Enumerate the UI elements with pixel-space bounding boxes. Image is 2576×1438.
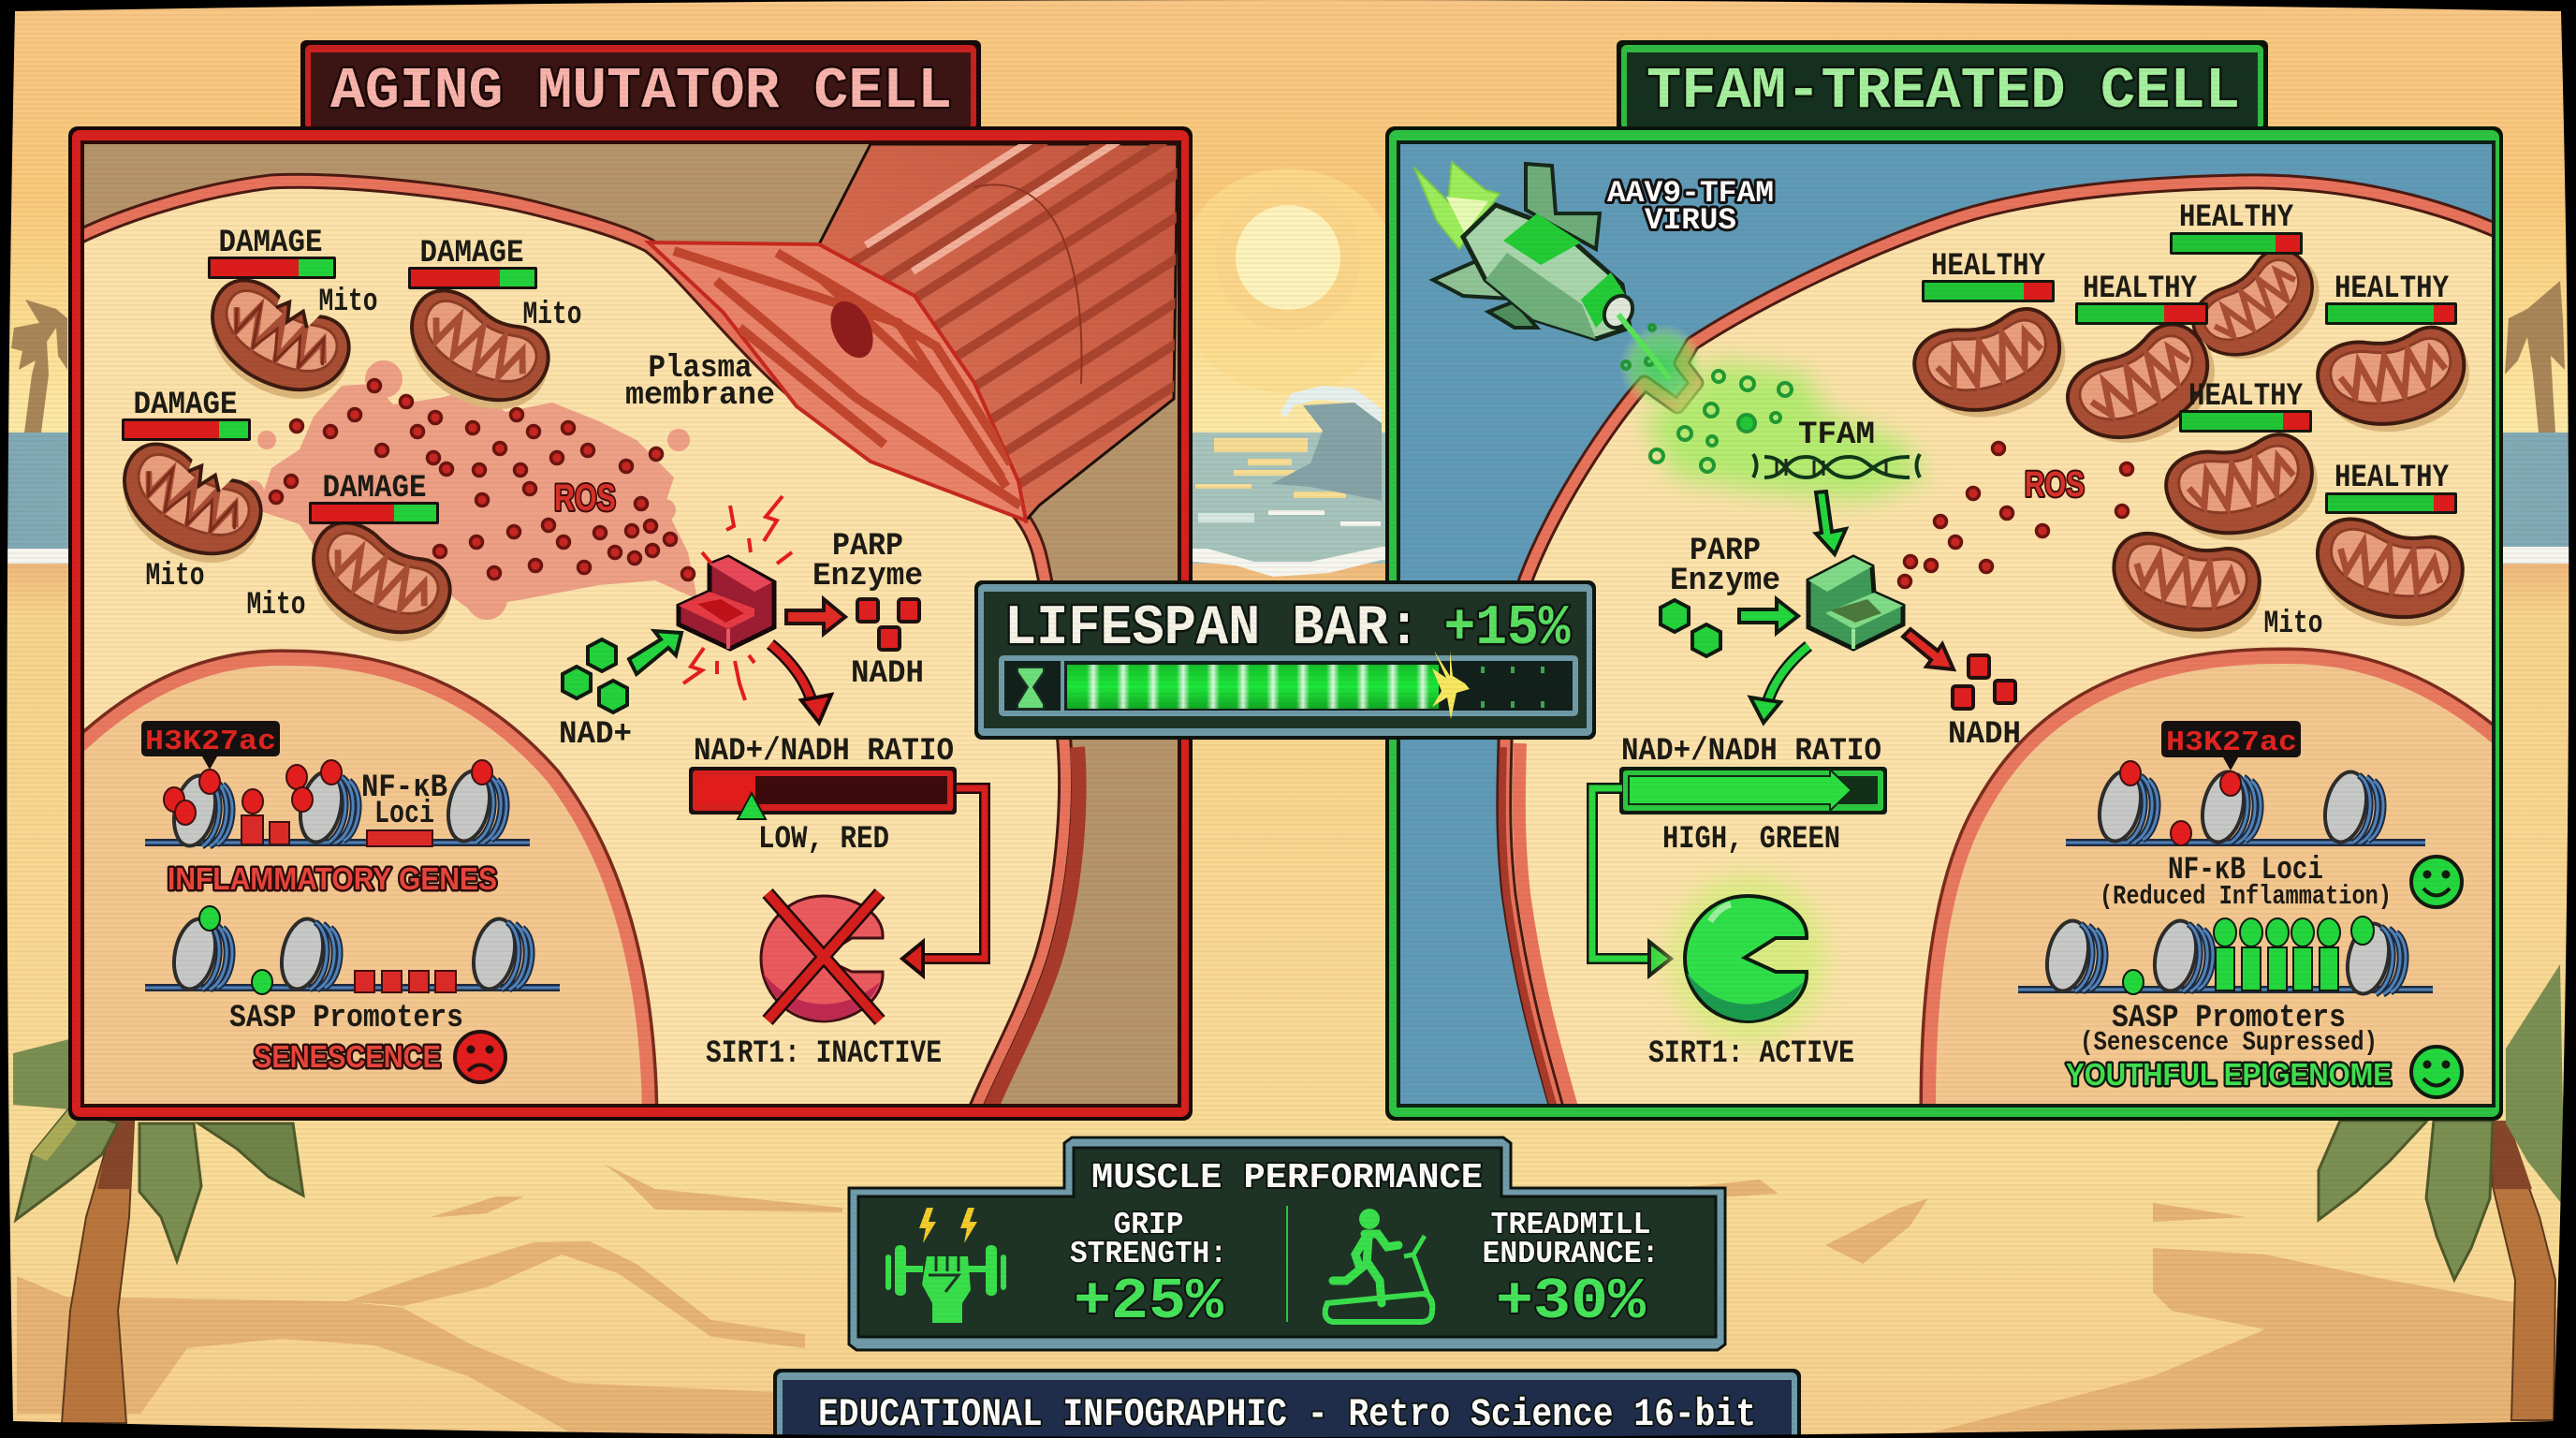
damaged mitochondrion 4: [289, 510, 464, 663]
sirt1 active label: SIRT1: ACTIVE: [1648, 1036, 1854, 1072]
icon: aav9 rocket: [1414, 162, 1638, 339]
healthy bar 1: [2170, 200, 2303, 255]
nucleus: [1929, 657, 2509, 1114]
mito labels: Mito: [522, 298, 582, 333]
muscle bundle: [644, 144, 1178, 524]
title tab: aging mutator cell: [300, 40, 981, 134]
ros cloud: ROS: [554, 477, 616, 519]
title tab: aging mutator cell: AGING MUTATOR CELL: [330, 58, 952, 125]
spark: [1432, 651, 1470, 719]
plasma membrane label: [625, 351, 775, 414]
plasma membrane label: Plasma: [648, 351, 753, 387]
aav9-tfam virus label: VIRUS: [1645, 203, 1736, 238]
mito labels: [146, 285, 582, 624]
healthy mitochondria: [1907, 237, 2478, 652]
treadmill endurance stat: [1483, 1208, 1659, 1335]
nf-kb chromatin: Loci: [374, 797, 434, 832]
healthy bar 4: [2325, 271, 2457, 325]
sasp chromatin: [2018, 917, 2433, 998]
reduced ros: [1898, 442, 2132, 588]
damage bar 2: [408, 236, 537, 289]
right palm silhouette: [2505, 281, 2565, 433]
footer banner: EDUCATIONAL INFOGRAPHIC - Retro Science 16-bit: [818, 1392, 1756, 1437]
sasp promoters label: SASP Promoters: [229, 1001, 463, 1036]
sasp promoters label: SASP Promoters: [2112, 1001, 2346, 1036]
mito label: Mito: [2263, 607, 2323, 642]
icon: active sirt1: [1669, 874, 1826, 1043]
healthy bar 3: [2075, 271, 2208, 325]
panel: muscle performance: [849, 1137, 1725, 1350]
nad+ hexagons: NAD+: [559, 717, 632, 753]
nf-kb loci label: NF-κB Loci: [2168, 853, 2323, 888]
panel: lifespan bar: [974, 580, 1596, 740]
nad+/nadh ratio gauge: HIGH, GREEN: [1662, 822, 1840, 858]
title tab: tfam-treated cell: [1617, 40, 2268, 134]
icon: red parp enzyme: [679, 496, 792, 700]
grip strength stat: +25%: [1074, 1269, 1224, 1335]
aav9-tfam virus label: AAV9-TFAM: [1607, 176, 1774, 211]
connector arrow to sirt1: [902, 788, 985, 976]
nadh squares: NADH: [851, 656, 924, 692]
icon: smiley: [2411, 857, 2462, 907]
parp enzyme label: Enzyme: [812, 559, 923, 594]
damaged mitochondrion 3: [100, 418, 282, 584]
healthy bar 4: HEALTHY: [2334, 271, 2450, 307]
footer banner: [773, 1369, 1801, 1438]
title tab: tfam-treated cell: TFAM-TREATED CELL: [1647, 58, 2240, 125]
nad+/nadh ratio gauge: NAD+/NADH RATIO: [1621, 734, 1881, 770]
nf-kb chromatin: [2066, 761, 2425, 846]
sparks: [683, 496, 792, 700]
tfam green cloud: [1619, 324, 1928, 501]
senescence label: SENESCENCE: [254, 1039, 441, 1074]
sea reflections: [1195, 438, 1346, 498]
nf-kb chromatin: [145, 760, 530, 850]
bottom right palm: [2319, 964, 2565, 1420]
grip strength stat: GRIP: [1114, 1208, 1183, 1242]
grip strength stat: [1070, 1208, 1227, 1335]
arrow: enzyme to nadh: [1903, 629, 1954, 669]
h3k27ac tag: [2161, 721, 2301, 770]
sasp promoters label: [2080, 1001, 2378, 1058]
nadh squares: [851, 599, 924, 692]
arrow: tfam to enzyme: [1816, 492, 1846, 554]
arrow: enzyme to ratio: [1750, 646, 1808, 723]
sirt1 inactive label: SIRT1: INACTIVE: [706, 1036, 942, 1072]
arrow: enzyme to ratio: [770, 644, 831, 723]
parp enzyme label: [1672, 537, 1778, 595]
youthful epigenome label: YOUTHFUL EPIGENOME: [2066, 1057, 2392, 1092]
healthy bar 2: [1922, 249, 2055, 302]
ros cloud: [242, 360, 697, 620]
progress bar: [999, 651, 1578, 719]
bottom left palm: [13, 1039, 303, 1423]
healthy bar 1: HEALTHY: [2179, 200, 2294, 236]
lifespan title: +15%: [1443, 597, 1571, 661]
nf-kb loci label: [2100, 853, 2392, 912]
icon: treadmill runner: [1325, 1209, 1432, 1322]
parp enzyme label: [812, 529, 923, 594]
tfam label and dna: [1753, 418, 1920, 477]
h3k27ac tag: H3K27ac: [145, 726, 276, 758]
treadmill endurance stat: TREADMILL: [1490, 1208, 1651, 1242]
nucleus: [66, 659, 649, 1114]
nf-kb loci label: (Reduced Inflammation): [2100, 881, 2392, 912]
nad+/nadh ratio gauge: [1619, 734, 1887, 858]
healthy bar 5: [2179, 379, 2312, 433]
nadh squares: NADH: [1948, 717, 2021, 753]
reduced ros: ROS: [2025, 465, 2085, 505]
damaged mitochondrion 1: [188, 255, 370, 420]
arrow: nad+ to enzyme: [629, 631, 681, 674]
nadh squares: [1948, 655, 2021, 753]
healthy bar 5: HEALTHY: [2188, 379, 2304, 415]
nad+ hexagons: [1661, 600, 1720, 656]
nad+/nadh ratio gauge: [689, 734, 957, 858]
healthy bar 6: HEALTHY: [2334, 461, 2450, 496]
nad+ hexagons: [559, 639, 632, 753]
damage bar 4: DAMAGE: [322, 471, 427, 506]
sasp chromatin: [145, 906, 560, 994]
icon: sad face: [455, 1032, 505, 1082]
wave: [1271, 386, 1382, 501]
sun: [1176, 169, 1400, 393]
h3k27ac tag: [141, 721, 280, 770]
parp enzyme label: Enzyme: [1670, 564, 1780, 599]
sea: [0, 433, 2576, 564]
plasma membrane label: membrane: [625, 378, 775, 414]
grip strength stat: STRENGTH:: [1070, 1237, 1227, 1271]
nad+/nadh ratio gauge: NAD+/NADH RATIO: [694, 734, 954, 770]
left palm silhouette: [11, 300, 67, 433]
treadmill endurance stat: +30%: [1496, 1269, 1647, 1335]
mito labels: Mito: [318, 285, 378, 320]
connector arrow to sirt1: [1592, 788, 1671, 976]
healthy bar 2: HEALTHY: [1931, 249, 2046, 285]
arrow: enzyme to nadh: [786, 599, 845, 634]
muscle heading: MUSCLE PERFORMANCE: [1091, 1158, 1483, 1198]
cell cytoplasm and plasma membrane: [75, 181, 1079, 1118]
parp enzyme label: PARP: [832, 529, 903, 565]
icon: grip dumbbell: [886, 1208, 1006, 1323]
virus beam: [1618, 315, 1670, 379]
damage bar 4: [309, 471, 439, 524]
icon: green parp enzyme: [1808, 557, 1903, 649]
damage bar 2: DAMAGE: [419, 236, 524, 271]
hourglass icon: [1017, 668, 1044, 709]
arrow: nad+ to enzyme: [1739, 599, 1798, 633]
nad+/nadh ratio gauge: LOW, RED: [758, 822, 889, 858]
damage bar 3: DAMAGE: [133, 388, 238, 423]
icon: smiley: [2411, 1047, 2462, 1097]
lifespan title: LIFESPAN BAR:: [1004, 597, 1420, 661]
cell cytoplasm and plasma membrane: [1502, 182, 2509, 1118]
dunes: [17, 1164, 2576, 1438]
icon: inactive sirt1: [761, 893, 883, 1021]
sand: [0, 564, 2576, 1438]
inflammatory genes label: INFLAMMATORY GENES: [168, 861, 497, 896]
healthy bar 3: HEALTHY: [2083, 271, 2198, 307]
tfam label and dna: TFAM: [1798, 418, 1875, 453]
sasp promoters label: (Senescence Supressed): [2080, 1027, 2378, 1058]
damage bar 1: [208, 226, 336, 279]
damage bar 1: DAMAGE: [219, 226, 322, 261]
damaged mitochondrion 2: [388, 278, 563, 431]
mito labels: Mito: [247, 588, 305, 624]
mito labels: Mito: [146, 559, 204, 594]
parp enzyme label: PARP: [1690, 534, 1761, 569]
nf-kb chromatin: NF-κB: [361, 770, 447, 806]
damage bar 3: [122, 388, 251, 441]
panel: aging mutator cell: [68, 126, 1193, 1121]
h3k27ac tag: H3K27ac: [2166, 726, 2297, 759]
aav9-tfam virus label: [1604, 178, 1775, 232]
treadmill endurance stat: ENDURANCE:: [1483, 1237, 1659, 1271]
healthy bar 6: [2325, 461, 2457, 514]
